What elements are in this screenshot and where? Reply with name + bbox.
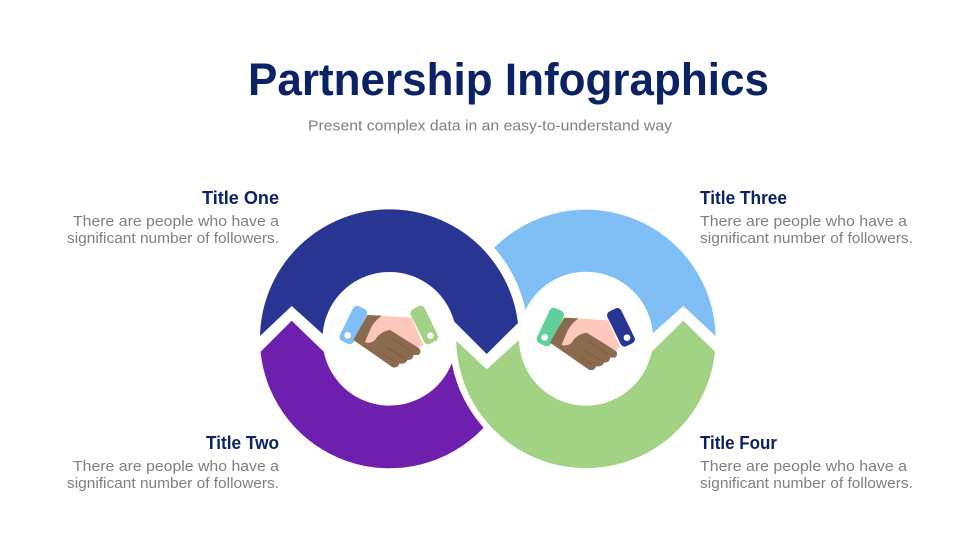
green cuff <box>409 304 440 346</box>
icon: left handshake <box>338 304 440 368</box>
brown hand <box>550 318 617 370</box>
icon: right handshake <box>535 306 636 370</box>
segment: light blue arc <box>494 210 716 336</box>
text block: Title One: Title One <box>202 188 279 208</box>
segment: purple arc <box>261 321 484 468</box>
pink hand <box>365 316 423 352</box>
text block: Title Two <box>67 433 280 492</box>
text block: Title One: significant number of followers. <box>67 230 279 247</box>
text block: Title Two: Title Two <box>206 433 279 453</box>
text block: Title Three <box>700 188 913 247</box>
segment: green arc <box>456 321 715 468</box>
text block: Title Four: Title Four <box>700 433 777 453</box>
text block: Title Two: significant number of followers. <box>67 475 279 492</box>
text block: Title Four: There are people who have a <box>700 458 908 475</box>
segment: navy arc <box>260 209 518 354</box>
text block: Title Three: Title Three <box>700 188 787 208</box>
subtitle: Present complex data in an easy-to-understand way <box>308 118 673 134</box>
finger lines <box>580 341 608 364</box>
title: Partnership Infographics <box>248 54 769 105</box>
text block: Title Four: significant number of followers. <box>700 475 913 492</box>
brown hand <box>353 315 420 368</box>
mint cuff <box>535 306 565 348</box>
text block: Title Three: significant number of followers. <box>700 230 913 247</box>
navy cuff <box>606 307 636 348</box>
pink hand <box>562 318 620 354</box>
text block: Title Four <box>700 433 913 492</box>
text block: Title One: There are people who have a <box>73 213 280 230</box>
text block: Title Three: There are people who have a <box>700 213 908 230</box>
finger lines <box>383 338 412 362</box>
text block: Title Two: There are people who have a <box>73 458 280 475</box>
blue cuff <box>338 304 369 346</box>
text block: Title One <box>67 188 280 247</box>
